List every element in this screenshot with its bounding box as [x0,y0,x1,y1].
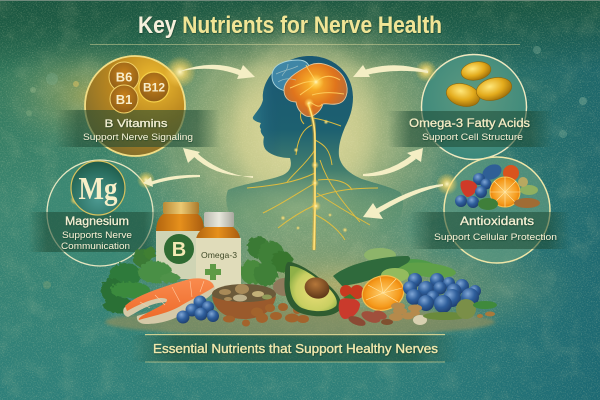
nerves [247,112,378,240]
person silhouette with brain and nerves [226,35,403,250]
nut bowl [212,278,297,319]
bottle: B vitamins [156,202,204,279]
bottle: omega-3 [196,212,241,290]
arrow: body to omega-3 [363,148,423,176]
brain [272,60,347,116]
salmon [123,278,215,324]
cucumber and lettuce [333,248,457,286]
softgels [444,60,514,110]
badge: B12: B12 [143,80,165,94]
label: omega-3 [409,118,530,143]
arrow: B vitamins to brain [178,65,255,79]
label: magnesium: Communication [61,241,130,252]
badge: B12 [139,72,169,102]
blueberries by salmon [176,296,219,324]
label: B vitamins: B Vitamins [104,118,168,130]
blueberries pile [403,273,481,313]
badge: B1: B1 [116,92,132,107]
kale greens [101,236,293,313]
sliced meat, almonds and beans [347,299,497,328]
badge: B6: B6 [116,70,132,84]
orange slice [358,271,408,315]
label: omega-3: Support Cell Structure [422,132,523,143]
tomatoes and strawberry [339,285,364,319]
caption band: Essential Nutrients that Support Healthy Nerves [153,342,438,356]
caption band [130,334,460,362]
label: magnesium [61,216,132,252]
panel: antioxidants [410,157,570,263]
label: antioxidants [434,216,557,243]
bottle: B vitamins: B [172,239,186,261]
label: magnesium: Magnesium [65,216,129,228]
badge: B1 [110,85,138,113]
label: antioxidants: Support Cellular Protection [434,232,557,243]
loose nuts [223,303,309,326]
label: B vitamins: Support Nerve Signaling [83,132,193,143]
arrow: body to B vitamins [183,148,253,178]
fruit [455,161,540,210]
panel: magnesium [28,160,163,266]
badge: B6 [109,62,139,92]
avocado [284,262,341,316]
silhouette [226,56,403,240]
arrow: antioxidants to spine [363,184,443,219]
arrow: body to magnesium [143,175,200,187]
label: B vitamins [83,118,193,143]
Mg medallion: Mg [78,170,118,206]
arrow: omega-3 to brain [353,65,428,77]
label: antioxidants: Antioxidants [460,216,534,228]
food group [101,202,497,336]
bottle: omega-3: Omega-3 [201,250,237,260]
title: Key Nutrients for Nerve Health [138,12,442,39]
panel: B vitamins [55,56,220,156]
label: omega-3: Omega-3 Fatty Acids [409,118,530,130]
label: magnesium: Supports Nerve [62,230,132,241]
panel: omega-3 [388,54,553,160]
